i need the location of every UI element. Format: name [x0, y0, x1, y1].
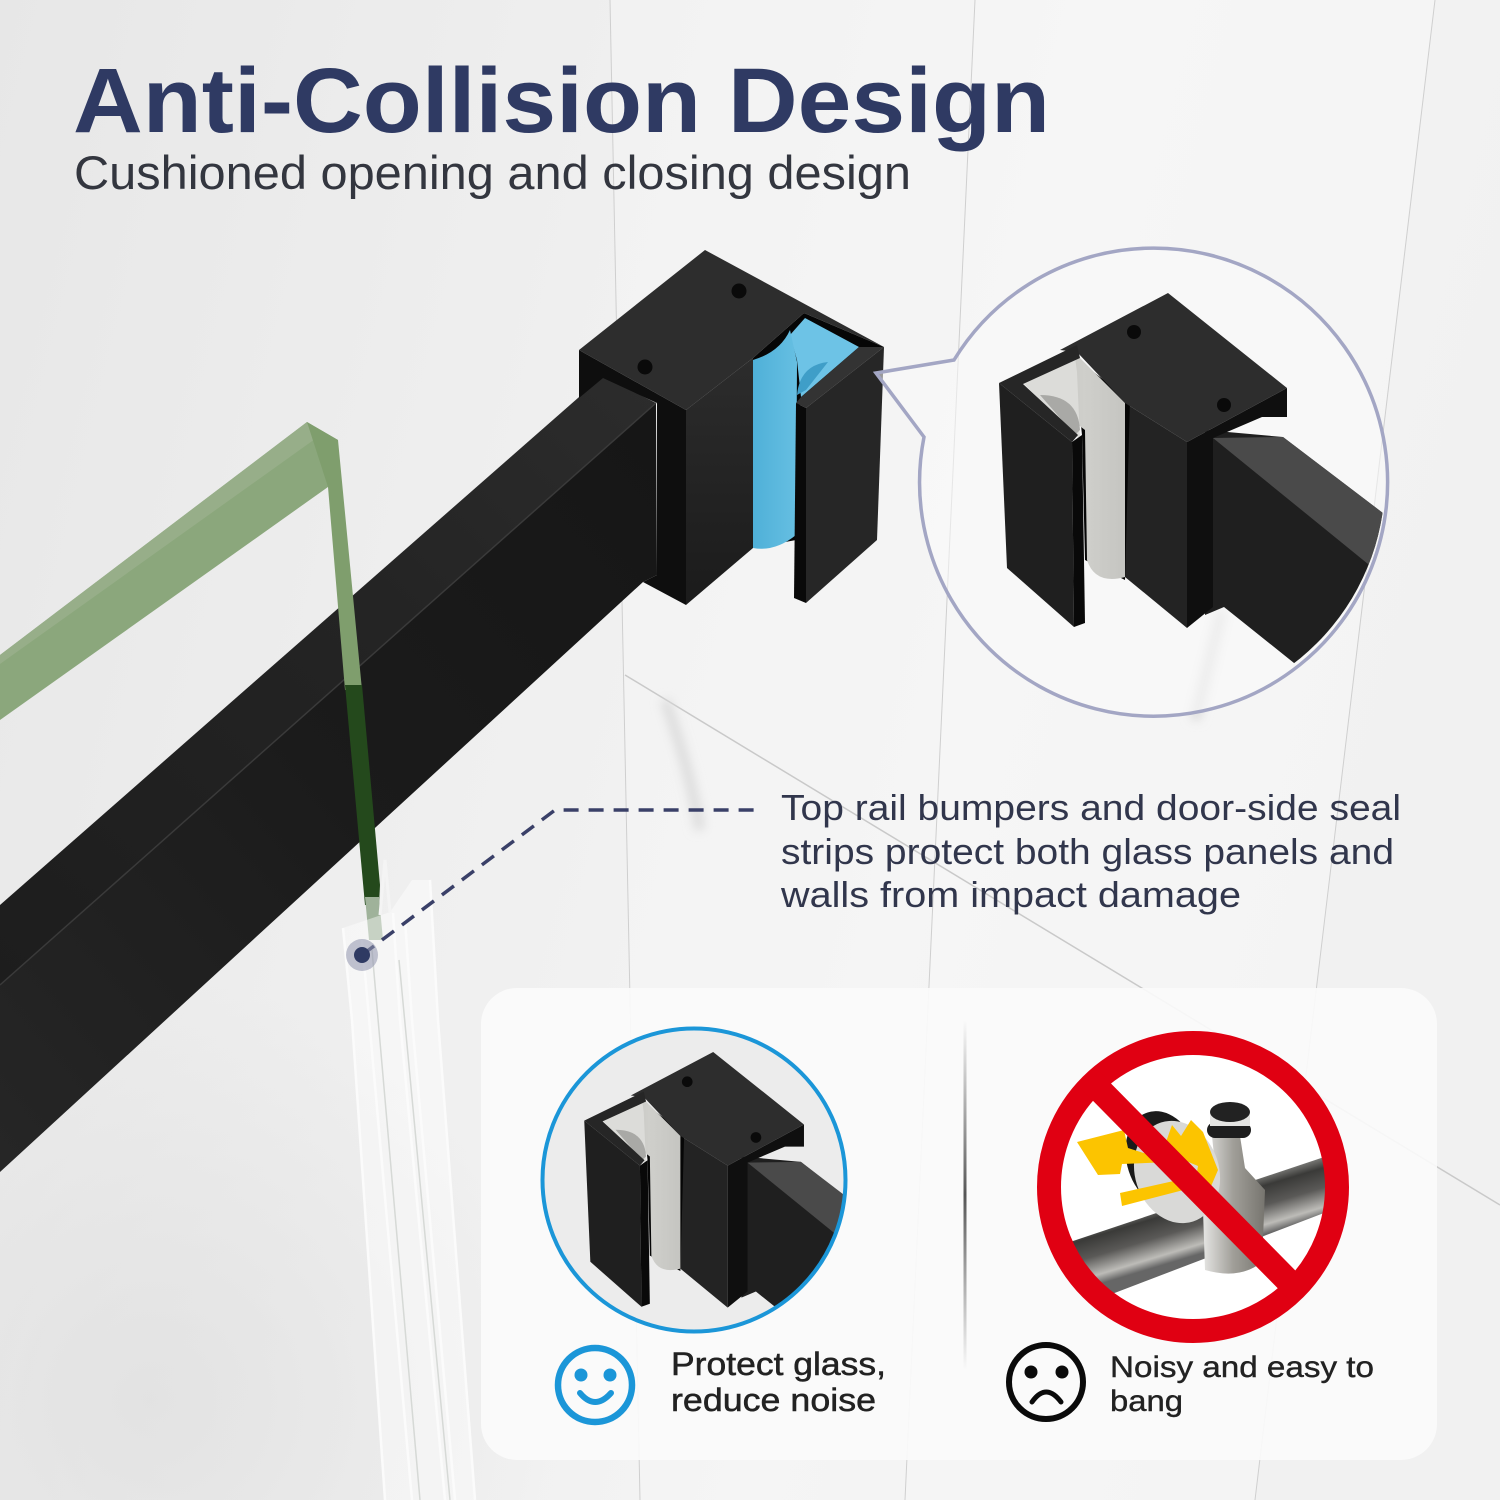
blue bumper: [753, 318, 859, 549]
bubble detail: bracket with grey bumper: [999, 293, 1382, 663]
glass edge over rail: [345, 685, 380, 905]
glass panel top edge and vertical edge: [0, 422, 362, 720]
callout text: Top rail bumpers and door-side seal: [781, 787, 1401, 828]
callout text: strips protect both glass panels and: [781, 831, 1394, 872]
good example: circle with bracket: [540, 1026, 848, 1334]
yellow impact arrow: [1077, 1120, 1218, 1206]
black top rail: [0, 376, 657, 1172]
bracket left face: [579, 350, 686, 605]
callout text: [780, 787, 1401, 915]
panel divider: [964, 1020, 966, 1370]
callout leader line: [362, 810, 758, 955]
glass lower edge over seal: [365, 897, 383, 940]
bad caption: [1110, 1351, 1374, 1418]
impact disc: [1126, 1111, 1220, 1224]
metal pipe: [1072, 1158, 1325, 1293]
red ring and slash: [1049, 1043, 1337, 1331]
bad example: prohibition sign with metal hinge: [1040, 1042, 1345, 1332]
transparent door seal strip: [343, 860, 475, 1500]
metal stem: [1202, 1102, 1265, 1274]
screw holes: [638, 284, 746, 374]
bad caption: bang: [1110, 1385, 1183, 1418]
bracket top face: [579, 250, 884, 410]
comparison panel: [481, 988, 1437, 1460]
smiley icon: [558, 1348, 632, 1422]
speech bubble zoom outline: [876, 248, 1388, 716]
recess: [753, 313, 884, 548]
sad face icon: [1009, 1345, 1083, 1419]
good caption: Protect glass,: [671, 1346, 886, 1382]
flap: [796, 347, 884, 408]
subtitle: Cushioned opening and closing design: [74, 146, 911, 199]
good caption: [671, 1346, 886, 1418]
main bracket with blue bumper: [579, 250, 884, 605]
title: Anti-Collision Design: [73, 50, 1050, 152]
callout text: walls from impact damage: [780, 874, 1241, 915]
good caption: reduce noise: [671, 1382, 876, 1418]
bad caption: Noisy and easy to: [1110, 1351, 1374, 1384]
bubble rail: [1205, 430, 1382, 663]
callout dot: [346, 939, 378, 971]
bracket front face: [686, 358, 753, 605]
